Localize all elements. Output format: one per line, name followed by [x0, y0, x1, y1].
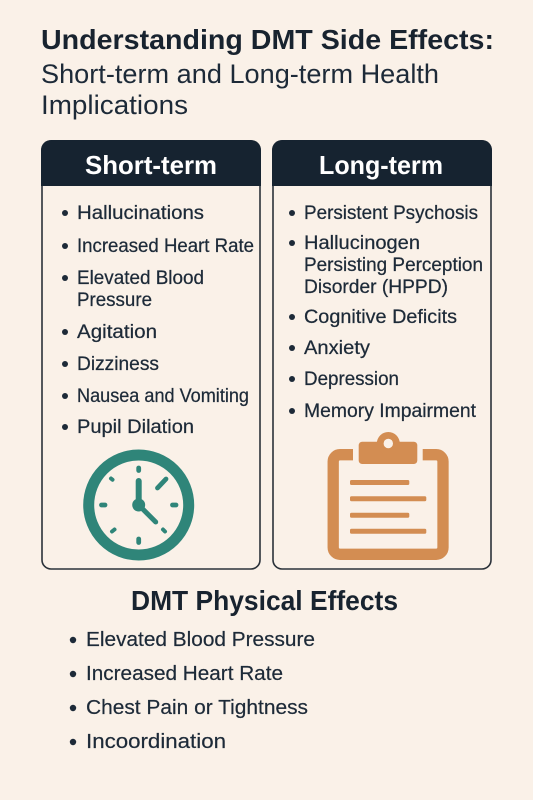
panel: short-term: [41, 140, 261, 569]
short-term header: [41, 140, 261, 186]
long-term symptom list: Persisting Perception: [304, 254, 483, 276]
title: Short-term and Long-term Health: [41, 59, 439, 89]
physical effects list: Elevated Blood Pressure: [86, 628, 315, 651]
short-term symptom list: Pressure: [77, 289, 152, 311]
short-term symptom list: Increased Heart Rate: [77, 235, 254, 257]
physical effects list: [70, 628, 315, 753]
long-term symptom list: Cognitive Deficits: [304, 306, 457, 328]
short-term symptom list: [62, 202, 254, 438]
long-term symptom list: Persistent Psychosis: [304, 202, 478, 224]
physical effects list: Increased Heart Rate: [86, 662, 283, 685]
short-term symptom list: Dizziness: [77, 353, 159, 375]
title: [41, 24, 494, 120]
short-term symptom list: Pupil Dilation: [77, 416, 194, 438]
title: Implications: [41, 90, 188, 120]
long-term symptom list: Anxiety: [304, 337, 370, 359]
icon: clock: [89, 455, 189, 555]
long-term header: [272, 140, 492, 186]
long-term symptom list: Memory Impairment: [304, 400, 477, 422]
long-term symptom list: [289, 202, 483, 422]
long-term header: Long-term: [319, 150, 443, 180]
physical effects list: Chest Pain or Tightness: [86, 696, 308, 719]
section heading: DMT Physical Effects: DMT Physical Effects: [131, 585, 398, 616]
icon: clipboard: [333, 432, 443, 554]
long-term symptom list: Hallucinogen: [304, 232, 420, 254]
short-term symptom list: Hallucinations: [77, 202, 204, 224]
short-term symptom list: Nausea and Vomiting: [77, 385, 249, 407]
short-term header: Short-term: [85, 150, 217, 180]
short-term symptom list: Elevated Blood: [77, 267, 204, 289]
title: Understanding DMT Side Effects:: [41, 24, 494, 55]
short-term symptom list: Agitation: [77, 321, 157, 343]
physical effects list: Incoordination: [86, 730, 226, 753]
long-term symptom list: Depression: [304, 368, 399, 390]
panel: long-term: [272, 140, 492, 569]
long-term symptom list: Disorder (HPPD): [304, 276, 448, 298]
